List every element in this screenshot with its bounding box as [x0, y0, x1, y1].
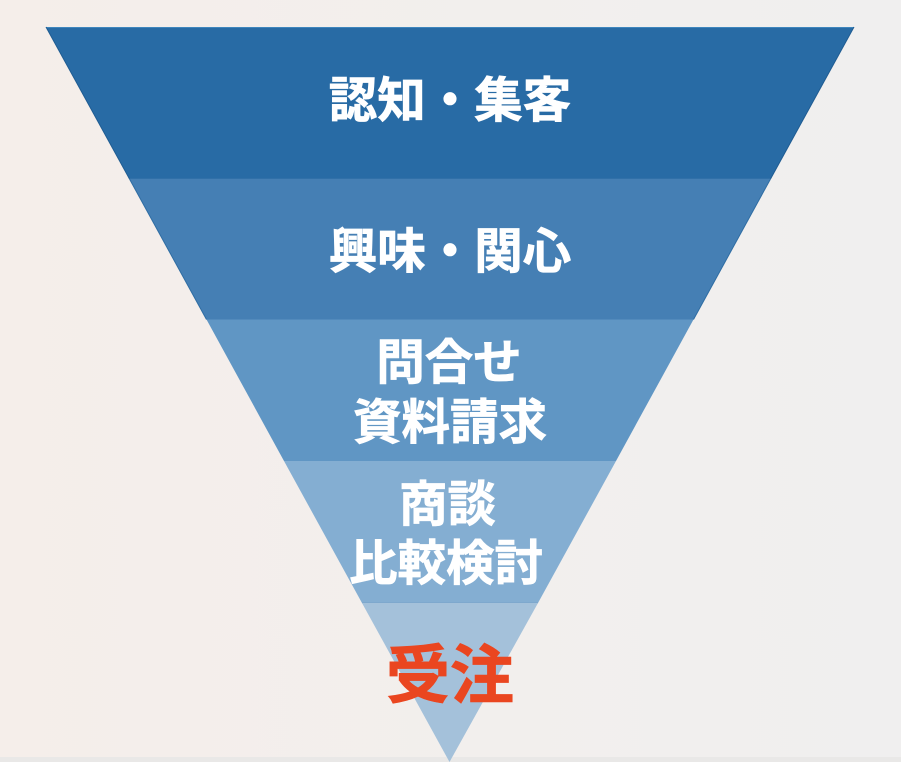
label: order received: 受注 — [386, 640, 514, 712]
funnel tier: awareness — [46, 27, 854, 179]
funnel tier: negotiation: 商談 — [399, 478, 496, 532]
funnel tier: awareness: 認知・集客 — [329, 74, 571, 128]
funnel tier: inquiry: 資料請求 — [353, 396, 547, 450]
funnel tier: negotiation: 比較検討 — [349, 537, 543, 591]
funnel tier: negotiation — [284, 461, 616, 603]
funnel tier: inquiry: 問合せ — [376, 336, 522, 390]
funnel tier: interest — [130, 179, 770, 320]
funnel tier: order — [362, 603, 538, 762]
funnel tier: inquiry — [206, 320, 694, 461]
funnel tier: interest: 興味・関心 — [329, 225, 571, 279]
